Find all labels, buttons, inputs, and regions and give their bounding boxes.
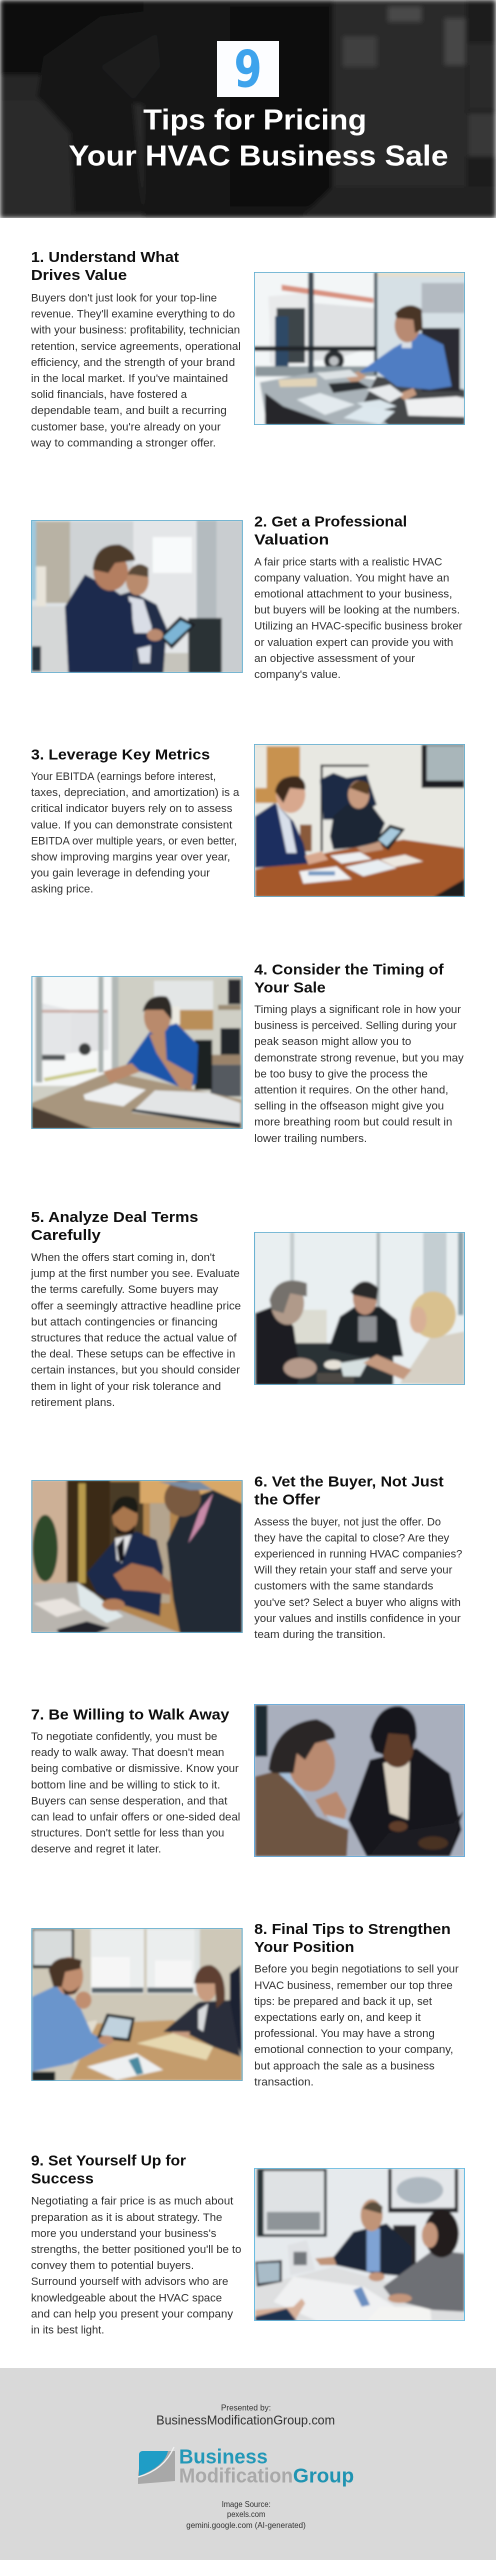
panel: tip 1 bbox=[30, 250, 465, 449]
text block: tip 2: but buyers will be looking at the numbers. bbox=[254, 605, 460, 617]
panel: tip 7 bbox=[31, 1704, 465, 1857]
text block: tip 9: convey them to potential buyers. bbox=[31, 2260, 194, 2272]
heading: tip 5: 5. Analyze Deal Terms bbox=[31, 1210, 198, 1226]
heading: tip 6: 6. Vet the Buyer, Not Just bbox=[254, 1474, 444, 1490]
text block: tip 3: EBITDA over multiple years, or even better, bbox=[31, 835, 237, 847]
text block: tip 1: in the local market. If you've maintained bbox=[31, 373, 228, 385]
text block: tip 2 bbox=[254, 556, 463, 681]
text block: tip 8: expectations early on, and keep it bbox=[254, 2012, 421, 2024]
text block: tip 8: Before you begin negotiations to sell your bbox=[254, 1964, 459, 1976]
photo: owner at desk with service van outside bbox=[254, 272, 465, 425]
text block: tip 1: efficiency, and the strength of your brand bbox=[31, 357, 235, 369]
heading: tip 6 bbox=[254, 1474, 444, 1508]
text block: tip 6: they have the capital to close? Are they bbox=[254, 1532, 450, 1544]
heading: tip 8 bbox=[254, 1922, 451, 1956]
text block: tip 3: critical indicator buyers rely on to assess bbox=[31, 803, 233, 815]
text block: tip 3: Your EBITDA (earnings before interest, bbox=[31, 771, 216, 783]
text block: tip 6 bbox=[254, 1516, 462, 1641]
text block: tip 4: Timing plays a significant role in how your bbox=[254, 1004, 461, 1016]
text block: tip 4: demonstrate strong revenue, but you may bbox=[254, 1052, 464, 1064]
text block: tip 5: certain instances, but you should consider bbox=[31, 1365, 240, 1377]
text block: tip 7: structures. Don't settle for less than you bbox=[31, 1828, 224, 1840]
panel: tip 4 bbox=[32, 962, 464, 1145]
logo wordmark: Modification bbox=[179, 2465, 293, 2487]
text block: tip 7: being combative or dismissive. Know your bbox=[31, 1763, 239, 1775]
heading: tip 8: 8. Final Tips to Strengthen bbox=[254, 1922, 451, 1938]
heading: tip 1: Drives Value bbox=[31, 268, 127, 284]
text block: tip 9: knowledgeable about the HVAC space bbox=[31, 2292, 222, 2304]
photo: man with tablet and woman reviewing folder bbox=[31, 1928, 243, 2081]
photo: smiling advisor meeting around a document-covered table bbox=[254, 2168, 465, 2321]
photo: two men at a wooden table with charts bbox=[254, 744, 465, 897]
logo wordmark: Business bbox=[179, 2446, 268, 2468]
heading: tip 5 bbox=[31, 1210, 198, 1244]
text block: tip 2: A fair price starts with a realistic HVAC bbox=[254, 556, 442, 568]
text block: tip 5: retirement plans. bbox=[31, 1397, 115, 1409]
panel: tip 6 bbox=[32, 1474, 462, 1641]
number badge: 9 bbox=[234, 41, 262, 100]
text block: tip 9: strengths, the better positioned you'll be to bbox=[31, 2244, 241, 2256]
presented by credit: Presented by: bbox=[221, 2404, 271, 2413]
text block: tip 3: taxes, depreciation, and amortization) is a bbox=[31, 787, 240, 799]
text block: tip 1: Buyers don't just look for your top-line bbox=[31, 292, 217, 304]
photo: man listening to a woman with a clipboard bbox=[254, 1704, 465, 1857]
text block: tip 4: peak season might allow you to bbox=[254, 1036, 411, 1048]
text block: tip 8: but approach the sale as a business bbox=[254, 2060, 435, 2072]
text block: tip 2: emotional attachment to your business, bbox=[254, 588, 452, 600]
heading: tip 9: 9. Set Yourself Up for bbox=[31, 2154, 186, 2170]
heading: tip 4: Your Sale bbox=[254, 980, 326, 996]
text block: tip 1: revenue. They'll examine everything to do bbox=[31, 309, 235, 321]
image source credit: gemini.google.com (AI-generated) bbox=[186, 2521, 306, 2530]
panel: tip 2 bbox=[31, 515, 463, 681]
text block: tip 5: but attach contingencies or financing bbox=[31, 1316, 218, 1328]
text block: tip 4 bbox=[254, 1004, 464, 1145]
photo: buyer and seller discussing documents bbox=[31, 1480, 243, 1633]
text block: tip 1: way to commanding a stronger offer. bbox=[30, 437, 216, 449]
text block: tip 7: deserve and regret it later. bbox=[31, 1844, 161, 1856]
text block: tip 6: your values and instills confidence in your bbox=[254, 1613, 461, 1625]
text block: tip 3: asking price. bbox=[31, 884, 93, 896]
heading: tip 7: 7. Be Willing to Walk Away bbox=[31, 1707, 230, 1723]
panel: tip 8 bbox=[32, 1922, 459, 2088]
text block: tip 6: experienced in running HVAC companies? bbox=[254, 1548, 462, 1560]
heading: tip 6: the Offer bbox=[254, 1492, 321, 1508]
text block: tip 9: and can help you present your company bbox=[31, 2308, 234, 2320]
title: Your HVAC Business Sale bbox=[69, 140, 448, 172]
panel: tip 3 bbox=[31, 744, 465, 897]
text block: tip 8: transaction. bbox=[254, 2076, 314, 2088]
title: Tips for Pricing bbox=[143, 104, 367, 136]
heading: tip 5: Carefully bbox=[31, 1228, 102, 1244]
heading: tip 1 bbox=[31, 250, 179, 284]
logo: Business Modification Group bbox=[138, 2446, 354, 2487]
heading: tip 4: 4. Consider the Timing of bbox=[254, 962, 444, 978]
title bbox=[69, 104, 448, 172]
text block: tip 5: the deal. These setups can be effective in bbox=[31, 1349, 235, 1361]
text block: tip 8: tips: be prepared and back it up, set bbox=[254, 1996, 432, 2008]
number badge bbox=[217, 41, 279, 100]
text block: tip 7: To negotiate confidently, you must be bbox=[31, 1731, 217, 1743]
image source credit bbox=[186, 2500, 306, 2530]
text block: tip 8: emotional connection to your company, bbox=[254, 2044, 453, 2056]
text block: tip 1: with your business: profitability, technician bbox=[30, 325, 240, 337]
text block: tip 9: Surround yourself with advisors who are bbox=[31, 2276, 228, 2288]
text block: tip 2: company valuation. You might have an bbox=[254, 572, 449, 584]
text block: tip 4: attention it requires. On the other hand, bbox=[254, 1084, 448, 1096]
text block: tip 6: customers with the same standards bbox=[254, 1581, 434, 1593]
image source credit: Image Source: bbox=[222, 2500, 271, 2509]
text block: tip 7: ready to walk away. That doesn't mean bbox=[31, 1747, 224, 1759]
text block: tip 4: more breathing room but could result in bbox=[254, 1117, 452, 1129]
text block: tip 4: business is perceived. Selling during your bbox=[254, 1020, 457, 1032]
text block: tip 9 bbox=[31, 2196, 241, 2336]
text block: tip 7: Buyers can sense desperation, and that bbox=[31, 1795, 227, 1807]
text block: tip 5: When the offers start coming in, don't bbox=[31, 1252, 215, 1264]
text block: tip 6: you've set? Select a buyer who aligns with bbox=[254, 1597, 461, 1609]
heading: tip 4 bbox=[254, 962, 444, 996]
heading: tip 9: Success bbox=[31, 2172, 94, 2188]
text block: tip 7: bottom line and be willing to stick to it. bbox=[31, 1779, 220, 1791]
text block: tip 1: customer base, you're already on your bbox=[31, 421, 221, 433]
heading: tip 2: 2. Get a Professional bbox=[254, 515, 407, 531]
panel: tip 9 bbox=[31, 2154, 465, 2336]
text block: tip 5: the terms carefully. Some buyers may bbox=[31, 1284, 219, 1296]
heading: tip 8: Your Position bbox=[254, 1940, 354, 1956]
logo wordmark: Group bbox=[293, 2465, 354, 2487]
image source credit: pexels.com bbox=[227, 2510, 266, 2519]
presented by credit bbox=[156, 2404, 335, 2427]
panel: tip 5 bbox=[30, 1210, 465, 1409]
text block: tip 3: show improving margins year over year, bbox=[31, 852, 230, 864]
logo icon bbox=[138, 2447, 175, 2484]
text block: tip 4: lower trailing numbers. bbox=[254, 1133, 367, 1145]
photo: owner reviewing binders at his desk bbox=[31, 976, 243, 1129]
text block: tip 1: solid financials, have fostered a bbox=[31, 389, 188, 401]
text block: tip 8: HVAC business, remember our top three bbox=[254, 1980, 453, 1992]
text block: tip 3: you gain leverage in defending your bbox=[31, 868, 210, 880]
text block: tip 3: value. If you can demonstrate consistent bbox=[31, 819, 232, 831]
logo wordmark bbox=[179, 2446, 354, 2487]
photo: three people negotiating at a cafe table bbox=[254, 1232, 465, 1385]
text block: tip 5: jump at the first number you see. Evaluate bbox=[30, 1268, 240, 1280]
text block: tip 3 bbox=[31, 771, 240, 896]
text block: tip 2: company's value. bbox=[254, 669, 341, 681]
text block: tip 4: be too busy to give the process the bbox=[254, 1068, 428, 1080]
heading: tip 9 bbox=[31, 2154, 186, 2188]
text block: tip 9: preparation as it is about strategy. The bbox=[31, 2212, 222, 2224]
heading: tip 2: Valuation bbox=[254, 533, 329, 549]
text block: tip 9: more you understand your business's bbox=[31, 2228, 217, 2240]
text block: tip 9: in its best light. bbox=[31, 2324, 104, 2336]
text block: tip 6: Will they retain your staff and serve your bbox=[254, 1565, 453, 1577]
text block: tip 8 bbox=[254, 1964, 459, 2088]
text block: tip 5 bbox=[30, 1252, 241, 1409]
text block: tip 1: dependable team, and built a recurring bbox=[31, 405, 227, 417]
text block: tip 5: offer a seemingly attractive headline price bbox=[31, 1300, 241, 1312]
text block: tip 7 bbox=[31, 1731, 240, 1856]
text block: tip 1 bbox=[30, 292, 241, 449]
header background photo: technician at HVAC unit bbox=[0, 0, 496, 218]
text block: tip 2: Utilizing an HVAC-specific business broker bbox=[254, 621, 463, 633]
text block: tip 8: professional. You may have a strong bbox=[254, 2028, 435, 2040]
header banner bbox=[0, 0, 496, 218]
footer panel bbox=[0, 2368, 496, 2560]
text block: tip 2: or valuation expert can provide you with bbox=[254, 637, 453, 649]
text block: tip 5: structures that reduce the actual value of bbox=[31, 1332, 238, 1344]
text block: tip 6: team during the transition. bbox=[254, 1629, 386, 1641]
text block: tip 7: can lead to unfair offers or one-sided deal bbox=[31, 1812, 240, 1824]
heading: tip 1: 1. Understand What bbox=[31, 250, 179, 266]
text block: tip 4: selling in the offseason might give you bbox=[254, 1101, 444, 1113]
heading: tip 2 bbox=[254, 515, 407, 549]
heading: tip 3: 3. Leverage Key Metrics bbox=[31, 747, 210, 763]
text block: tip 6: Assess the buyer, not just the offer. Do bbox=[254, 1516, 441, 1528]
presented by credit: BusinessModificationGroup.com bbox=[156, 2413, 335, 2427]
text block: tip 9: Negotiating a fair price is as much about bbox=[31, 2196, 233, 2208]
text block: tip 5: them in light of your risk tolerance and bbox=[31, 1381, 221, 1393]
text block: tip 1: retention, service agreements, operational bbox=[31, 341, 241, 353]
photo: two men reviewing a tablet by HVAC equipment bbox=[31, 520, 243, 673]
text block: tip 2: an objective assessment of your bbox=[254, 653, 415, 665]
